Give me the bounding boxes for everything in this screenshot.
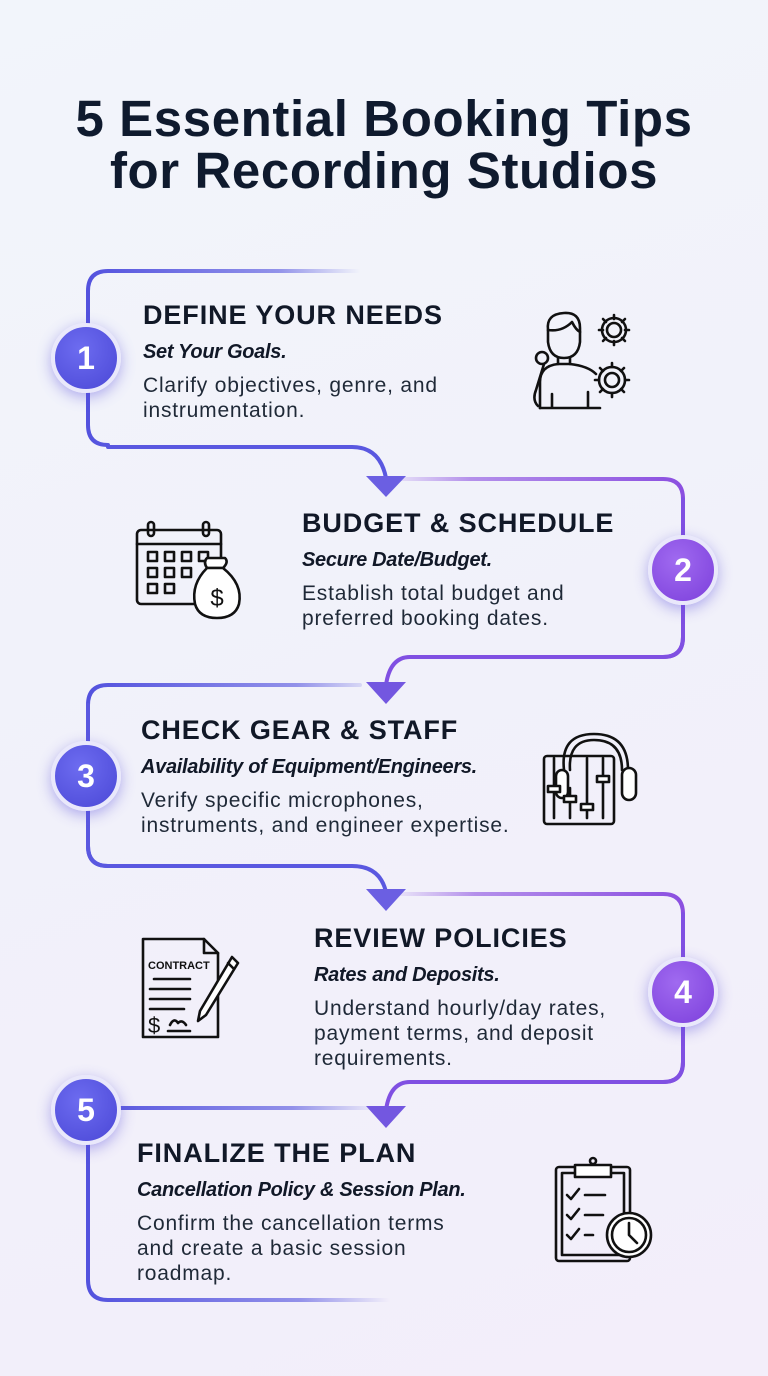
step 4 text bbox=[314, 923, 606, 1070]
step 1 text: Set Your Goals. bbox=[143, 341, 286, 363]
step 2 text: Secure Date/Budget. bbox=[302, 549, 492, 571]
title: for Recording Studios bbox=[110, 142, 658, 199]
step 5 text: and create a basic session bbox=[137, 1237, 406, 1260]
step 2 text: Establish total budget and bbox=[302, 582, 564, 605]
title: 5 Essential Booking Tips bbox=[75, 90, 693, 147]
number badge 1: 1 bbox=[77, 340, 95, 376]
step 4 text: REVIEW POLICIES bbox=[314, 923, 568, 953]
number badge 1 bbox=[51, 323, 121, 393]
step 4 text: requirements. bbox=[314, 1047, 453, 1070]
icon: clipboard with clock bbox=[554, 1156, 652, 1262]
number badge 2 bbox=[648, 535, 718, 605]
step 4 text: Rates and Deposits. bbox=[314, 964, 499, 986]
step 2 text bbox=[302, 508, 614, 630]
step 1 text bbox=[143, 300, 443, 422]
icon: headphones mixer bbox=[542, 732, 638, 826]
step 4 text: payment terms, and deposit bbox=[314, 1022, 594, 1045]
title bbox=[75, 90, 693, 199]
number badge 3 bbox=[51, 741, 121, 811]
step 3 text: Availability of Equipment/Engineers. bbox=[141, 756, 477, 778]
step 3 text: CHECK GEAR & STAFF bbox=[141, 715, 458, 745]
step 2 text: BUDGET & SCHEDULE bbox=[302, 508, 614, 538]
step 1 text: Clarify objectives, genre, and bbox=[143, 374, 438, 397]
step 3 text bbox=[140, 715, 510, 837]
step 5 text: FINALIZE THE PLAN bbox=[137, 1138, 416, 1168]
number badge 5: 5 bbox=[77, 1092, 95, 1128]
icon: calendar with money bag bbox=[136, 520, 241, 620]
icon: contract: $ bbox=[148, 1013, 160, 1038]
step 2 text: preferred booking dates. bbox=[302, 607, 549, 630]
step 5 text bbox=[137, 1138, 466, 1285]
number badge 4: 4 bbox=[674, 974, 692, 1010]
step 1 text: DEFINE YOUR NEEDS bbox=[143, 300, 443, 330]
step 3 text: Verify specific microphones, bbox=[141, 789, 424, 812]
number badge 4 bbox=[648, 957, 718, 1027]
step 1 text: instrumentation. bbox=[143, 399, 305, 422]
icon: contract bbox=[142, 938, 240, 1038]
icon: calendar with money bag: $ bbox=[210, 585, 224, 612]
step 5 text: roadmap. bbox=[137, 1262, 232, 1285]
number badge 2: 2 bbox=[674, 552, 692, 588]
icon: contract: CONTRACT bbox=[148, 960, 210, 972]
icon: singer with gears bbox=[533, 312, 630, 410]
step 3 text: instruments, and engineer expertise. bbox=[141, 814, 510, 837]
number badge 3: 3 bbox=[77, 758, 95, 794]
step 4 text: Understand hourly/day rates, bbox=[314, 997, 606, 1020]
step 5 text: Cancellation Policy & Session Plan. bbox=[137, 1179, 466, 1201]
number badge 5 bbox=[51, 1075, 121, 1145]
step 5 text: Confirm the cancellation terms bbox=[137, 1212, 445, 1235]
